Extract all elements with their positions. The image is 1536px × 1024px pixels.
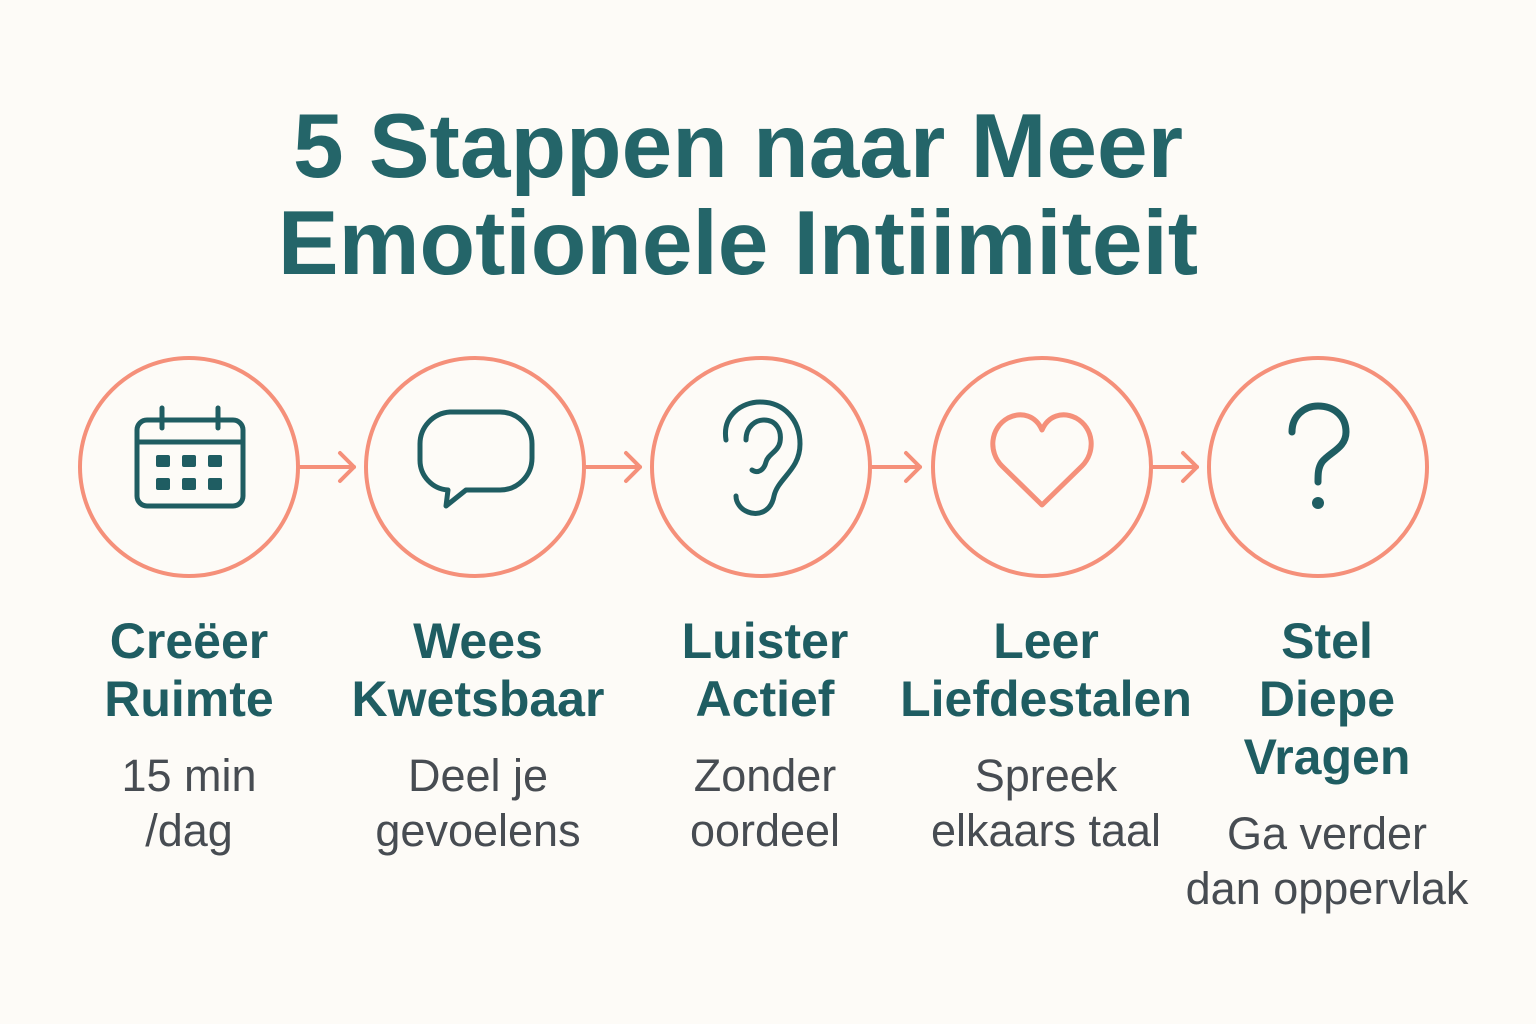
step 3 text <box>682 613 848 856</box>
step 3 text: Actief <box>696 671 834 727</box>
title: 5 Stappen naar Meer <box>293 96 1183 197</box>
circle 3 with ear icon <box>652 358 870 576</box>
arrow 2 <box>586 453 640 481</box>
step 1 text: 15 min <box>121 750 257 801</box>
step 3 text: Zonder <box>694 750 836 801</box>
step 2 text: Wees <box>413 613 543 669</box>
step 3 text: Luister <box>682 613 848 669</box>
step 2 text: Deel je <box>408 750 548 801</box>
step 1 text: Creëer <box>110 613 268 669</box>
step 4 text <box>900 613 1192 856</box>
step 4 text: Spreek <box>975 750 1117 801</box>
title: Emotionele Intiimiteit <box>278 193 1198 294</box>
circle 2 with speech bubble icon <box>366 358 584 576</box>
step 5 text: Vragen <box>1244 729 1410 785</box>
arrow 3 <box>872 453 920 481</box>
circle 4 with heart icon <box>933 358 1151 576</box>
step 5 text: Ga verder <box>1227 808 1427 859</box>
step 1 text: /dag <box>145 805 233 856</box>
step 4 text: Liefdestalen <box>900 671 1192 727</box>
arrow 4 <box>1153 453 1197 481</box>
step 5 text: dan oppervlak <box>1186 863 1468 914</box>
step 5 text: Diepe <box>1259 671 1395 727</box>
step 3 text: oordeel <box>690 805 840 856</box>
step 4 text: elkaars taal <box>931 805 1161 856</box>
step 5 text: Stel <box>1281 613 1373 669</box>
arrow 1 <box>300 453 354 481</box>
circle 1 with calendar icon <box>80 358 298 576</box>
step 2 text: Kwetsbaar <box>352 671 604 727</box>
step 1 text <box>104 613 274 856</box>
step 4 text: Leer <box>993 613 1099 669</box>
step 2 text <box>352 613 604 856</box>
step 1 text: Ruimte <box>104 671 274 727</box>
step 5 text <box>1186 613 1468 914</box>
step 2 text: gevoelens <box>375 805 581 856</box>
title <box>278 96 1198 294</box>
circle 5 with question mark icon <box>1209 358 1427 576</box>
